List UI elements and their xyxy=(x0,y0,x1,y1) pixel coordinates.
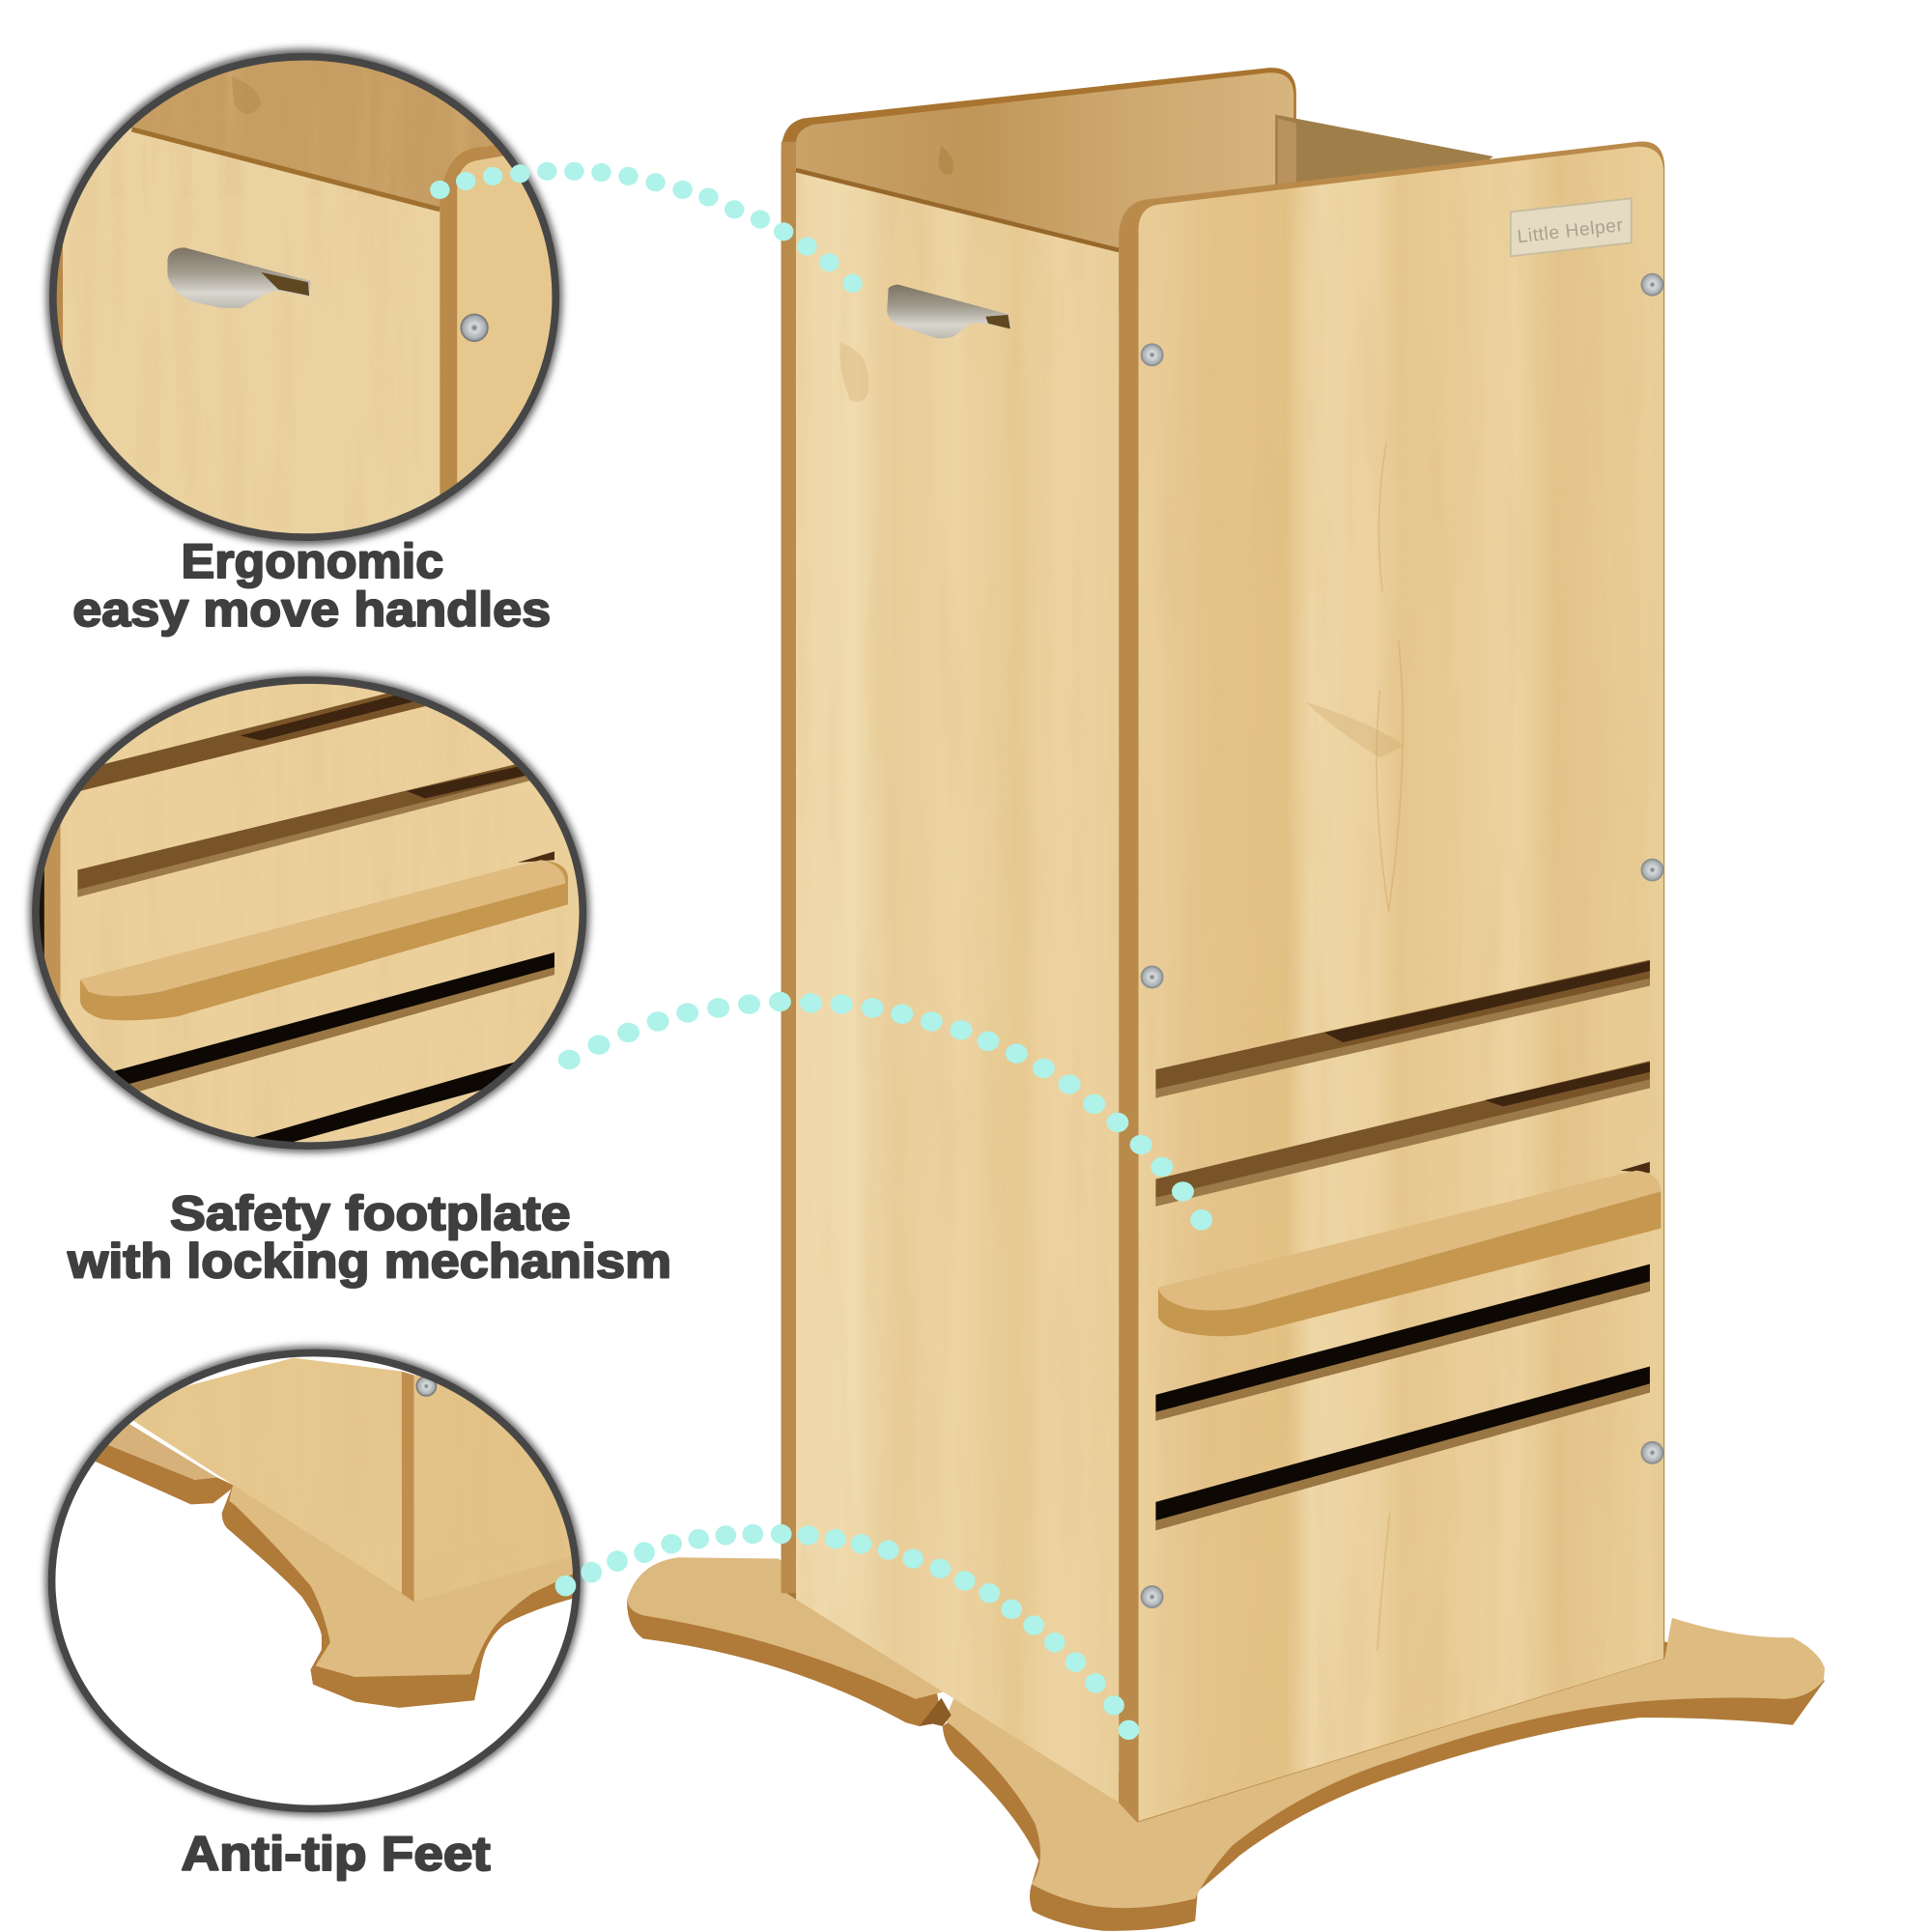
label: safety footplate xyxy=(67,1186,671,1289)
side panel with handle xyxy=(796,160,1122,1811)
panel: footplate close-up circle xyxy=(31,671,591,1158)
dotted connector: footplate xyxy=(558,992,1212,1231)
icon: close-up handle xyxy=(167,247,310,308)
label: ergonomic handles: easy move handles xyxy=(72,582,551,637)
dotted connector: handle xyxy=(430,162,863,293)
nameplate xyxy=(1511,198,1632,256)
icon: close-up screw xyxy=(461,314,488,341)
panel: handle close-up circle xyxy=(49,49,567,542)
panel: anti-tip feet close-up circle xyxy=(52,1353,585,1808)
foot-rest slots xyxy=(1155,960,1650,1530)
icon: side handle xyxy=(887,285,1011,338)
label: ergonomic handles xyxy=(72,534,551,637)
icon: close-up screw xyxy=(416,1377,437,1396)
screws xyxy=(1141,273,1663,1608)
front panel xyxy=(1119,141,1665,1824)
base feet xyxy=(627,1557,1825,1931)
back panel xyxy=(781,68,1493,1600)
label: safety footplate: with locking mechanism xyxy=(67,1235,671,1289)
label: safety footplate: Safety footplate xyxy=(170,1186,571,1240)
tower product illustration xyxy=(627,68,1825,1931)
dotted connector: feet xyxy=(555,1524,1139,1740)
label: anti-tip feet: Anti-tip Feet xyxy=(182,1827,491,1881)
label: ergonomic handles: Ergonomic xyxy=(182,534,443,588)
footplate xyxy=(1158,1171,1661,1336)
nameplate: Little Helper xyxy=(1517,215,1625,247)
